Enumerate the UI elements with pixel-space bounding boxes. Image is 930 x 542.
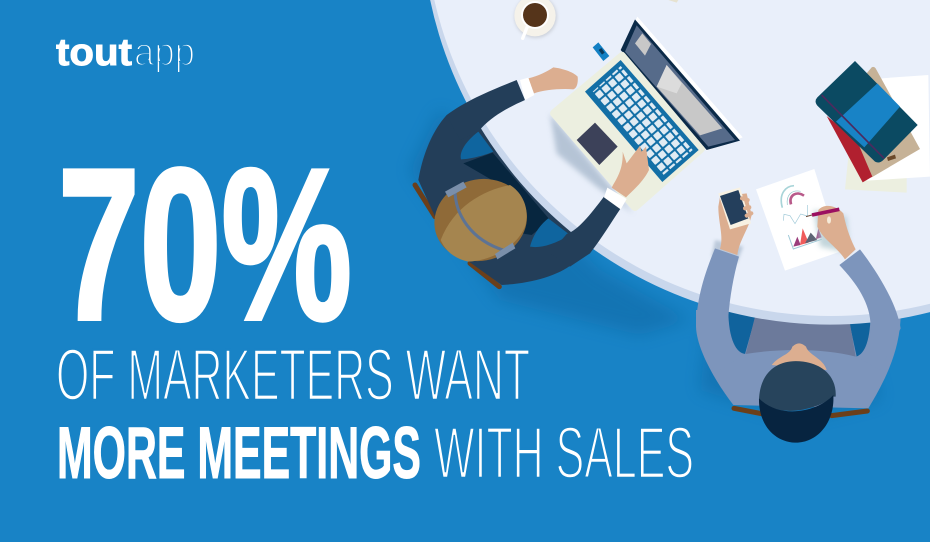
screen: [625, 25, 735, 147]
notebooks stack: [816, 61, 930, 193]
hand shadow on paper: [813, 210, 850, 253]
line chart: [783, 205, 807, 224]
hand on keyboard: [612, 146, 649, 197]
headset pad: [495, 243, 515, 259]
hand with pencil: [806, 206, 856, 259]
hair: [425, 169, 536, 271]
gap by right arm: [530, 218, 570, 247]
chair: [415, 185, 499, 287]
screen window pane: [657, 65, 682, 93]
laptop base: [550, 52, 705, 211]
hand with phone: [718, 187, 752, 255]
headline line 2: WITH SALES: [434, 413, 694, 494]
logo: tout: [56, 32, 132, 74]
screen window large: [657, 65, 722, 135]
headset band: [455, 190, 505, 251]
keyboard: [585, 60, 699, 182]
arm left: [447, 80, 525, 140]
logo: [56, 31, 195, 74]
tan notebook: [830, 67, 920, 177]
phone shadow: [712, 240, 743, 263]
logo: app: [134, 31, 195, 74]
gap right: [847, 310, 871, 357]
laptop: [550, 17, 743, 213]
red notebook: [827, 116, 872, 182]
right scene: [696, 61, 930, 443]
screen edge: [621, 17, 743, 151]
strap: [822, 95, 884, 158]
head with headset: [425, 169, 536, 271]
white sheet: [867, 75, 930, 181]
screen frame: [621, 19, 740, 150]
torso: [418, 115, 597, 285]
gap by left arm: [461, 132, 493, 159]
lap: [746, 310, 856, 357]
arm right: [550, 197, 621, 267]
hair: [759, 361, 836, 411]
paper with charts: [756, 169, 840, 271]
sleeve right: [839, 249, 901, 370]
cuff left: [520, 78, 534, 100]
person right: seated body below table: [696, 310, 901, 416]
sleeve left: [696, 248, 745, 370]
left scene: [425, 0, 743, 271]
person left: seated body below table: [415, 115, 597, 287]
tag: [887, 155, 896, 161]
hair highlight: [441, 185, 527, 262]
dark notebook: [816, 61, 918, 163]
icon: usb stick: [593, 42, 609, 61]
headset pad: [445, 182, 467, 197]
small paper corner: [668, 0, 678, 3]
table top: [424, 0, 930, 316]
chair: [734, 408, 867, 416]
headline line 1: OF MARKETERS WANT: [56, 335, 530, 416]
table: [421, 0, 930, 325]
area chart peaks: [793, 228, 822, 247]
torso: [696, 310, 901, 408]
hair shadow: [759, 395, 833, 443]
blue band: [836, 83, 900, 147]
headline line 2: MORE MEETINGS: [57, 413, 421, 494]
gauge arcs: [781, 186, 794, 208]
cuff right: [604, 188, 627, 209]
screen window small: [635, 33, 651, 56]
head: [759, 343, 836, 443]
keys: [592, 66, 693, 176]
table rim: [421, 0, 930, 325]
laptop shadow: [550, 113, 633, 213]
big statistic: 70%: [58, 123, 352, 365]
touchpad: [577, 123, 618, 165]
gap left: [728, 310, 757, 354]
area chart axis: [788, 235, 822, 249]
torso shadow: [463, 153, 550, 235]
hand on laptop edge: [528, 67, 578, 93]
cream sheet: [845, 157, 907, 193]
icon: coffee cup: [514, 0, 557, 38]
shadows under table: [410, 110, 880, 420]
neck: [772, 343, 827, 370]
